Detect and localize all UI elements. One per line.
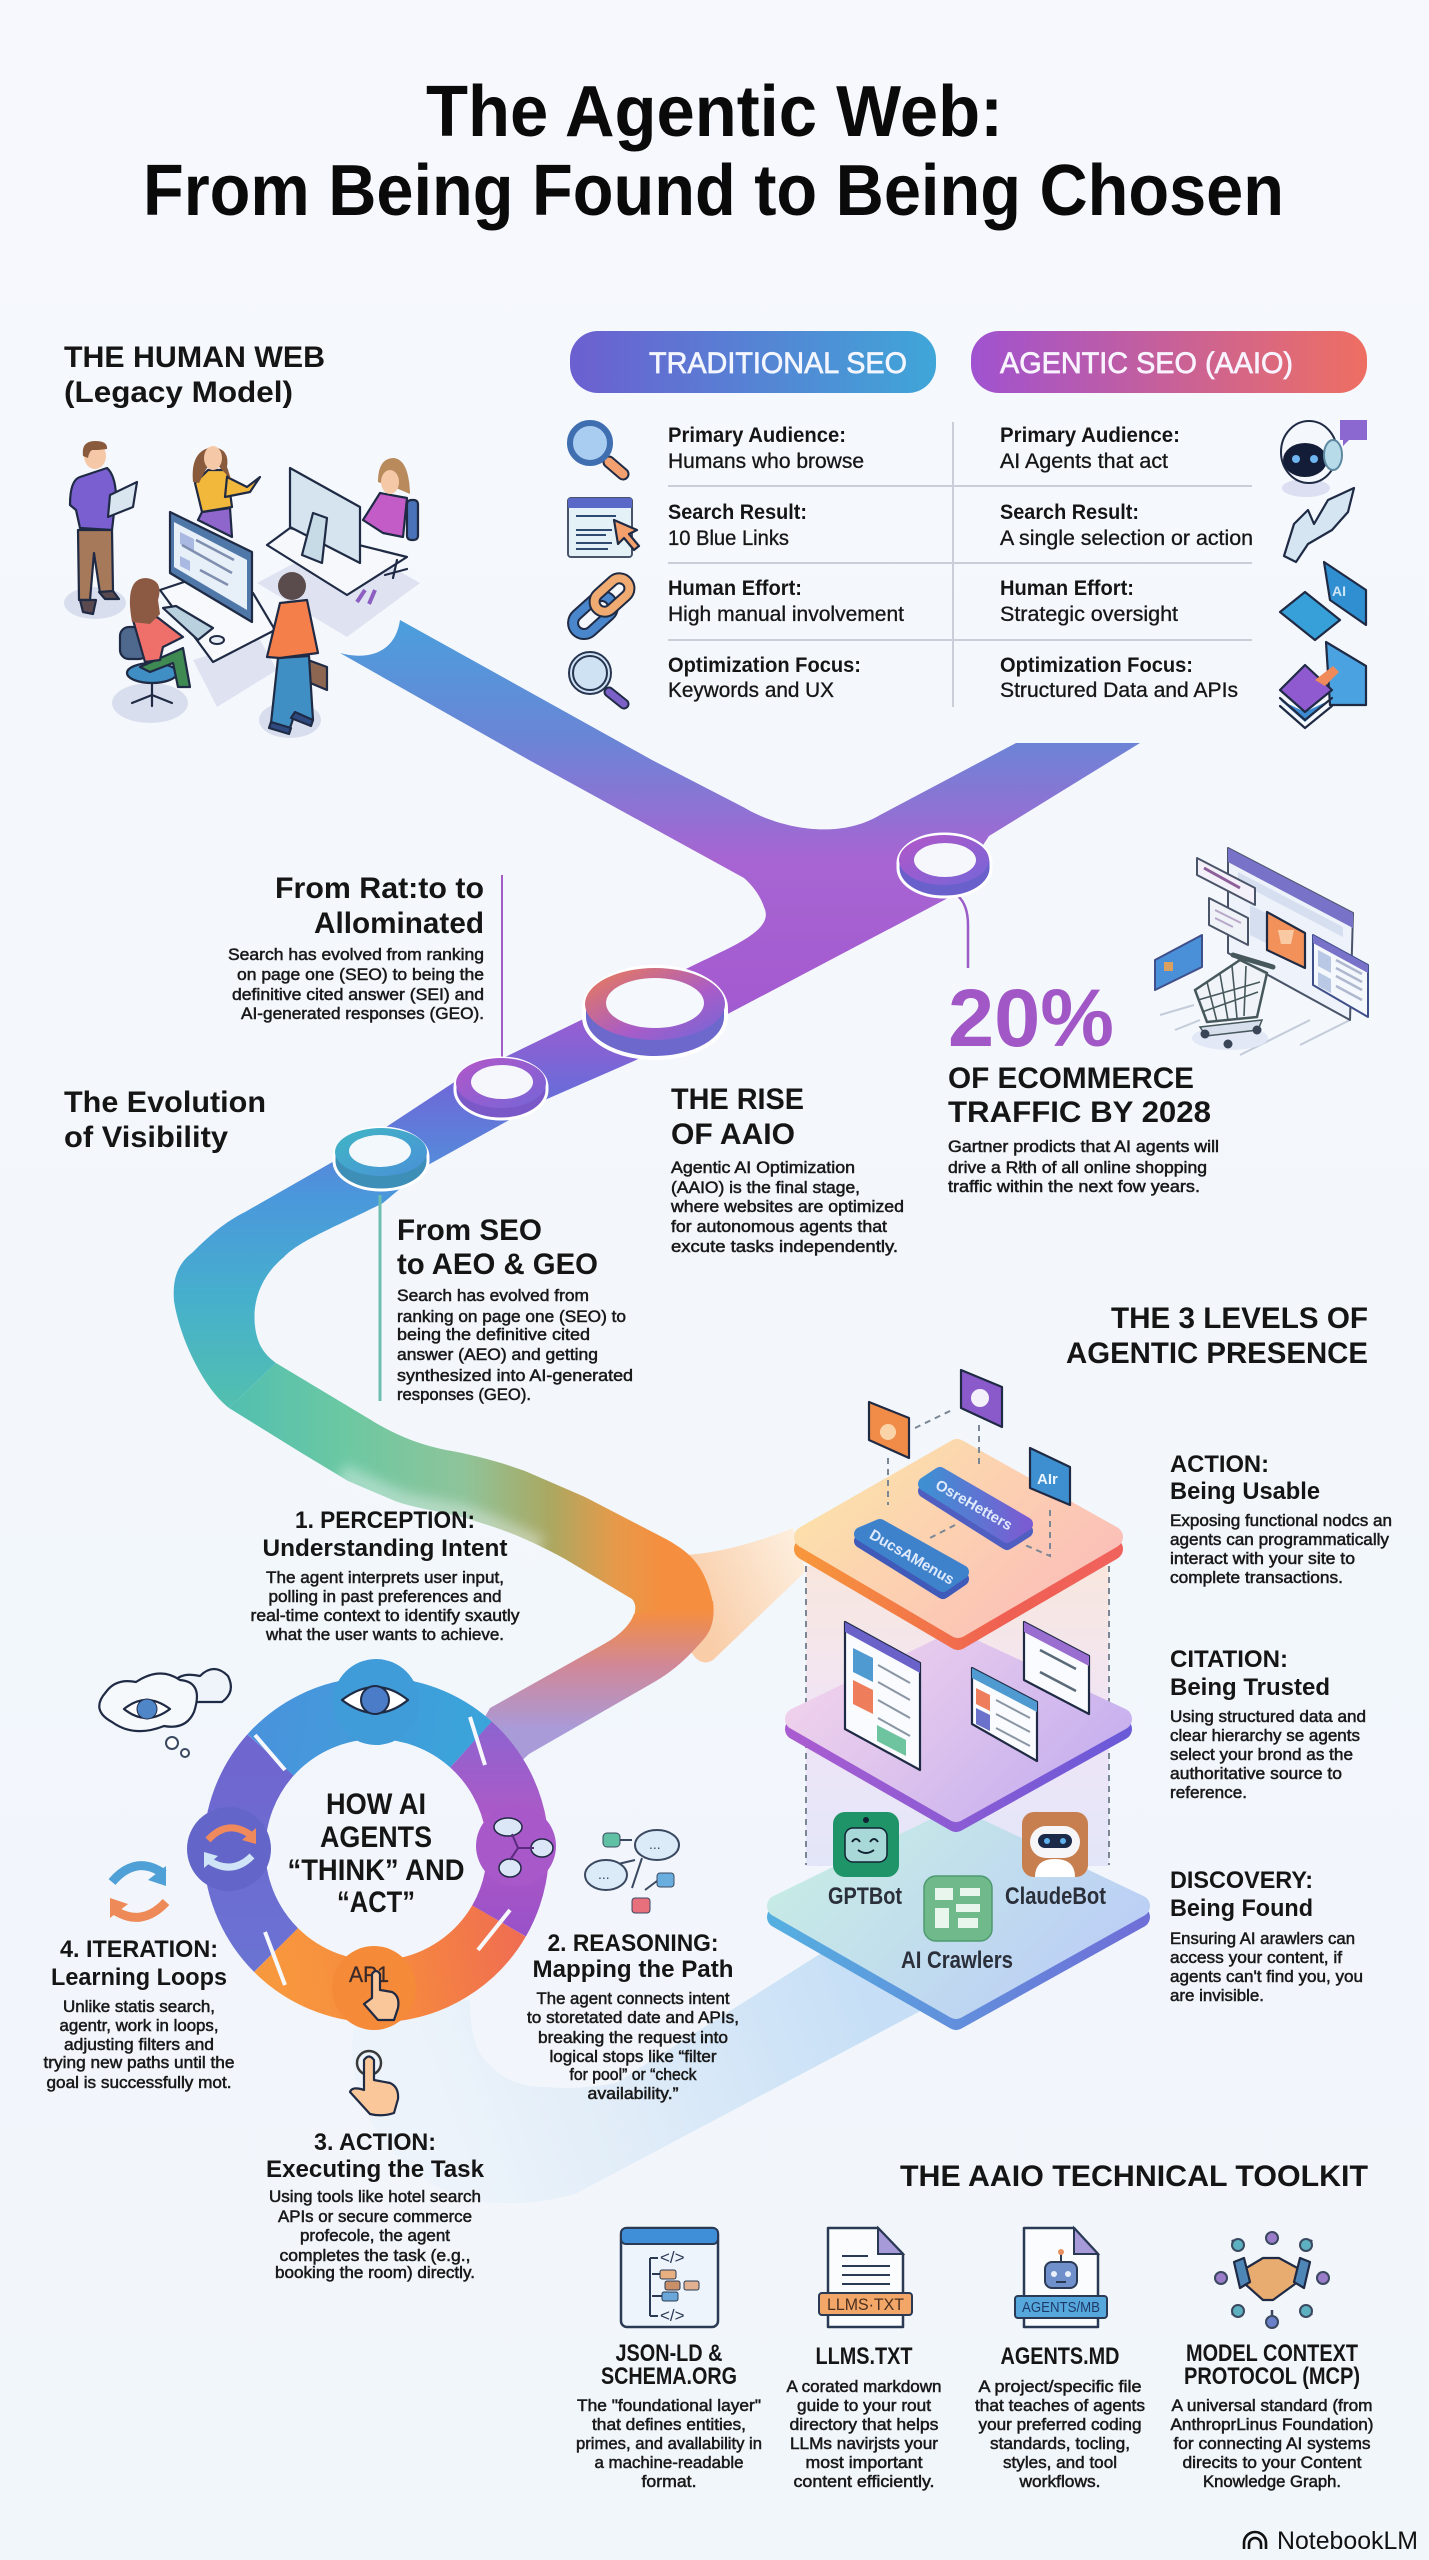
text: reasoning: 2. REASONING: xyxy=(548,1930,718,1957)
platform: citation xyxy=(796,1642,1121,1821)
text: iteration: adjusting filters and xyxy=(64,2035,214,2054)
ribbon: orange to ring stretch xyxy=(460,1601,714,1790)
center label: “THINK” AND xyxy=(288,1854,464,1887)
platform: discovery xyxy=(778,1819,1139,2019)
text: action: Using tools like hotel search xyxy=(269,2187,481,2206)
title: The Agentic Web: xyxy=(426,72,1003,152)
text: from SEO to AEO and GEO xyxy=(397,1214,633,1404)
stat: 20 percent ecommerce traffic: traffic within the next fow years. xyxy=(948,1177,1200,1196)
block: the evolution of visibility xyxy=(64,1086,266,1154)
node: purple coin xyxy=(455,1058,547,1119)
text: reasoning: The agent connects intent xyxy=(536,1989,730,2008)
text: citation level: select your brond as the xyxy=(1170,1745,1353,1764)
tool: model context protocol: MODEL CONTEXT xyxy=(1186,2340,1358,2367)
title: From Being Found to Being Chosen xyxy=(143,151,1284,231)
text: action level: ACTION: xyxy=(1170,1451,1269,1478)
row: search result xyxy=(668,501,1253,550)
icon: reasoning diagram: ... xyxy=(649,1836,661,1852)
icon: robot with chat bubble xyxy=(1281,420,1367,497)
text: action level: Exposing functional nodcs an xyxy=(1170,1511,1392,1530)
title xyxy=(143,72,1284,231)
text: perception: real-time context to identify sxautly xyxy=(250,1606,520,1625)
node: large coin xyxy=(584,967,726,1058)
icon: iteration loop arrows xyxy=(110,1866,166,1918)
tool: AGENTS.MD: styles, and tool xyxy=(1003,2453,1117,2472)
tool: LLMS.TXT: content efficiently. xyxy=(794,2472,934,2491)
text: action level: interact with your site to xyxy=(1170,1549,1355,1568)
row: optimization focus: Optimization Focus: xyxy=(668,654,861,677)
ring segment: iteration xyxy=(234,1755,276,1950)
stat: 20 percent ecommerce traffic: Gartner prodicts that AI agents will xyxy=(948,1137,1219,1156)
ring segment: action xyxy=(276,1921,499,1991)
bot labels xyxy=(828,1883,1106,1974)
ribbon: branch to platform xyxy=(684,1528,806,1662)
pill: traditional SEO xyxy=(570,331,936,393)
tool: JSON-LD and schema.org: The "foundational layer" xyxy=(577,2396,761,2415)
text: discovery level: Being Found xyxy=(1170,1895,1313,1922)
row: search result: A single selection or action xyxy=(1000,527,1253,550)
icon: AGENTS.MD document xyxy=(1015,2228,1107,2327)
main monitor and desk xyxy=(160,512,275,662)
text: citation level: reference. xyxy=(1170,1783,1247,1802)
center label: “ACT” xyxy=(337,1886,415,1919)
text: iteration: Unlike statis search, xyxy=(63,1997,215,2016)
text: action level: agents can programmatically xyxy=(1170,1530,1389,1549)
text: from SEO to AEO and GEO: being the definitive cited xyxy=(397,1325,590,1344)
row: primary audience: AI Agents that act xyxy=(1000,450,1168,473)
tool: JSON-LD and schema.org: SCHEMA.ORG xyxy=(601,2363,737,2390)
text: action: 3. ACTION: xyxy=(314,2129,436,2156)
text: action level: Being Usable xyxy=(1170,1478,1320,1505)
heading: the 3 levels of agentic presence xyxy=(1066,1302,1368,1370)
text: the rise of AAIO: for autonomous agents that xyxy=(671,1217,887,1236)
text: from SEO to AEO and GEO: synthesized into AI-generated xyxy=(397,1366,633,1385)
illustration: shopping cart and web pages xyxy=(1155,848,1368,1055)
text: from rat to alominated: on page one (SEO) to being the xyxy=(237,965,484,984)
icon: AI tablet xyxy=(1280,562,1366,640)
text: iteration: goal is successfully mot. xyxy=(46,2073,232,2092)
icon: reasoning diagram: ... xyxy=(598,1866,610,1882)
text: citation level: authoritative source to xyxy=(1170,1764,1342,1783)
translucent column xyxy=(806,1566,1109,1866)
block: the evolution of visibility: The Evolution xyxy=(64,1086,266,1119)
node: teal coin xyxy=(334,1128,428,1190)
logo: NotebookLM: NotebookLM xyxy=(1277,2527,1418,2555)
text: iteration: Learning Loops xyxy=(51,1964,227,1991)
data-flow arrows xyxy=(888,1410,1050,1556)
text: reasoning: availability.” xyxy=(588,2084,679,2103)
row: optimization focus: Optimization Focus: xyxy=(1000,654,1193,677)
text: from SEO to AEO and GEO: Search has evolved from xyxy=(397,1286,589,1305)
stat: 20 percent ecommerce traffic xyxy=(948,973,1219,1196)
icon: search results window xyxy=(568,498,639,557)
heading: the human web: (Legacy Model) xyxy=(64,376,293,409)
text: iteration: trying new paths until the xyxy=(44,2053,234,2072)
tool: LLMS.TXT: most important xyxy=(806,2453,923,2472)
text: from SEO to AEO and GEO: From SEO xyxy=(397,1214,542,1247)
row: search result: 10 Blue Links xyxy=(668,527,789,550)
text: perception xyxy=(250,1507,520,1644)
text: action: booking the room) directly. xyxy=(275,2263,475,2282)
icon: magnifier orange xyxy=(570,423,623,474)
center label xyxy=(288,1788,464,1919)
text: citation level: CITATION: xyxy=(1170,1646,1288,1673)
row: human effort: Human Effort: xyxy=(1000,577,1134,600)
icon: AI tablet: AI xyxy=(1332,583,1346,599)
tool: model context protocol: AnthroprLinus Foundation) xyxy=(1170,2415,1374,2434)
text: reasoning: logical stops like “filter xyxy=(550,2047,717,2066)
text: citation level: Using structured data and xyxy=(1170,1707,1366,1726)
text: discovery level: Ensuring AI arawlers can xyxy=(1170,1929,1355,1948)
tool: model context protocol: Knowledge Graph. xyxy=(1203,2472,1341,2491)
icon: MCP handshake hub xyxy=(1215,2232,1329,2328)
tool: JSON-LD and schema.org: primes, and avallability in xyxy=(576,2434,762,2453)
text: discovery level: are invisible. xyxy=(1170,1986,1264,2005)
stat: 20 percent ecommerce traffic: TRAFFIC BY 2028 xyxy=(948,1096,1211,1129)
text: reasoning: Mapping the Path xyxy=(532,1956,734,1983)
text: perception: Understanding Intent xyxy=(262,1535,508,1562)
text: action: Executing the Task xyxy=(266,2156,485,2183)
row: search result: Search Result: xyxy=(1000,501,1139,524)
tool: model context protocol xyxy=(1170,2340,1374,2491)
tool: AGENTS.MD xyxy=(975,2343,1145,2491)
icon: chain link xyxy=(569,574,634,639)
row: optimization focus: Keywords and UX xyxy=(668,679,834,702)
tool: LLMS.TXT: LLMS.TXT xyxy=(816,2343,913,2370)
stat: 20 percent ecommerce traffic: OF ECOMMERCE xyxy=(948,1062,1194,1095)
tool: model context protocol: direcits to your Content xyxy=(1182,2453,1362,2472)
pill: agentic SEO xyxy=(971,331,1367,393)
text: from rat to alominated: Search has evolved from ranking xyxy=(228,945,484,964)
tool: LLMS.TXT: A corated markdown xyxy=(786,2377,942,2396)
api pill lower: DucsAMenus xyxy=(866,1526,957,1589)
text: from rat to alominated: From Rat:to to xyxy=(275,872,484,905)
api pill upper xyxy=(925,1474,1026,1543)
stat: 20 percent ecommerce traffic: drive a Rłth of all online shopping xyxy=(948,1158,1207,1177)
api pill upper: OsreHetters xyxy=(932,1477,1015,1534)
center label: AGENTS xyxy=(320,1821,432,1854)
node: eye xyxy=(333,1659,419,1745)
row: primary audience: Humans who browse xyxy=(668,450,864,473)
text: perception: 1. PERCEPTION: xyxy=(295,1507,475,1534)
bot tile: ClaudeBot xyxy=(1022,1812,1088,1877)
platform: action xyxy=(805,1450,1112,1639)
icon: handshake gesture xyxy=(1284,488,1354,562)
bot tile: GPTBot xyxy=(833,1812,899,1877)
text: from rat to alominated xyxy=(228,872,484,1023)
row: primary audience: Primary Audience: xyxy=(668,424,846,447)
person gesturing xyxy=(193,446,260,537)
tool: LLMS.TXT: LLMs navirjsts your xyxy=(790,2434,938,2453)
text: action level: complete transactions. xyxy=(1170,1568,1343,1587)
person with laptop xyxy=(70,441,137,614)
text: the rise of AAIO: OF AAIO xyxy=(671,1118,795,1151)
bot labels: GPTBot xyxy=(828,1883,902,1910)
tool: LLMS.TXT: guide to your rout xyxy=(797,2396,931,2415)
row: human effort: Human Effort: xyxy=(668,577,802,600)
node: api touch xyxy=(332,1946,416,2030)
pill: traditional SEO: TRADITIONAL SEO xyxy=(649,347,907,380)
text: discovery level: DISCOVERY: xyxy=(1170,1867,1313,1894)
ribbon: green to orange stretch xyxy=(229,1363,713,1616)
icon: LLMS.TXT document: LLMS·TXT xyxy=(827,2295,904,2314)
node: network xyxy=(476,1806,556,1886)
text: perception: polling in past preferences and xyxy=(268,1587,502,1606)
text: from SEO to AEO and GEO: to AEO & GEO xyxy=(397,1248,598,1281)
icon: JSON window: </> xyxy=(660,2248,685,2267)
cycle ring: how AI agents think and act xyxy=(187,1659,556,2030)
tool: AGENTS.MD: your preferred coding xyxy=(978,2415,1142,2434)
node: refresh xyxy=(187,1807,271,1891)
row: primary audience: Primary Audience: xyxy=(1000,424,1180,447)
text: reasoning: for pool” or “check xyxy=(570,2065,697,2084)
text: action: profecole, the agent xyxy=(300,2226,450,2245)
tool: JSON-LD and schema.org: a machine-readable xyxy=(594,2453,744,2472)
tool: AGENTS.MD: A project/specific file xyxy=(978,2377,1142,2396)
text: action xyxy=(266,2129,485,2282)
tool: AGENTS.MD: standards, tocling, xyxy=(990,2434,1130,2453)
web documents on citation platform xyxy=(845,1622,1089,1770)
standing person with briefcase xyxy=(267,572,327,734)
text: action: APIs or secure commerce xyxy=(278,2207,472,2226)
tool: LLMS.TXT: directory that helps xyxy=(790,2415,938,2434)
node: top right coin xyxy=(898,834,991,897)
text: the rise of AAIO: where websites are optimized xyxy=(670,1197,904,1216)
stacked platform diagram xyxy=(778,1370,1139,2019)
bot labels: ClaudeBot xyxy=(1005,1883,1106,1910)
tool: AGENTS.MD: workflows. xyxy=(1018,2472,1100,2491)
text: from rat to alominated: AI-generated responses (GEO). xyxy=(241,1004,484,1023)
icon: LLMS.TXT document xyxy=(819,2228,912,2327)
ribbon: main journey path xyxy=(174,620,1140,1408)
icon: AGENTS.MD document: AGENTS/MB xyxy=(1022,2299,1100,2316)
tool: model context protocol: PROTOCOL (MCP) xyxy=(1184,2363,1360,2390)
connector lines xyxy=(380,875,968,1401)
text: action: completes the task (e.g., xyxy=(280,2246,470,2265)
pill: agentic SEO: AGENTIC SEO (AAIO) xyxy=(1000,347,1293,380)
text: perception: The agent interprets user input, xyxy=(266,1568,504,1587)
illustration: people working at computers xyxy=(64,441,420,738)
text: citation level xyxy=(1170,1646,1366,1802)
tool: JSON-LD and schema.org: that defines entities, xyxy=(592,2415,746,2434)
ring segment: perception xyxy=(270,1708,471,1755)
text: reasoning: breaking the request into xyxy=(538,2028,728,2047)
text: discovery level: agents can't find you, you xyxy=(1170,1967,1363,1986)
tool: JSON-LD and schema.org: format. xyxy=(642,2472,696,2491)
heading: the 3 levels of agentic presence: THE 3 LEVELS OF xyxy=(1111,1302,1368,1335)
icon: pointing hand xyxy=(350,2051,398,2115)
block: the evolution of visibility: of Visibility xyxy=(64,1121,228,1154)
row: optimization focus xyxy=(668,654,1238,702)
text: perception: what the user wants to achieve. xyxy=(265,1625,504,1644)
text: from rat to alominated: definitive cited answer (SEI) and xyxy=(232,985,484,1004)
icon: magnifier purple xyxy=(569,652,624,704)
text: the rise of AAIO xyxy=(670,1083,904,1256)
tool: model context protocol: A universal standard (from xyxy=(1172,2396,1372,2415)
bot labels: AI Crawlers xyxy=(901,1947,1013,1974)
tool: LLMS.TXT xyxy=(786,2343,942,2491)
icon: reasoning diagram xyxy=(585,1830,679,1913)
tool: AGENTS.MD: that teaches of agents xyxy=(975,2396,1145,2415)
text: discovery level xyxy=(1170,1867,1363,2005)
heading: the human web xyxy=(64,341,325,409)
row: human effort: Strategic oversight xyxy=(1000,603,1178,626)
tool: model context protocol: for connecting AI systems xyxy=(1174,2434,1370,2453)
ring segment: reasoning xyxy=(471,1744,518,1921)
text: iteration: 4. ITERATION: xyxy=(60,1936,218,1963)
text: the rise of AAIO: (AAIO) is the final stage, xyxy=(671,1178,860,1197)
text: from SEO to AEO and GEO: responses (GEO). xyxy=(397,1385,531,1404)
text: the rise of AAIO: THE RISE xyxy=(671,1083,804,1116)
text: reasoning: to storetated date and APIs, xyxy=(527,2008,739,2027)
text: discovery level: access your content, if xyxy=(1170,1948,1342,1967)
row: human effort xyxy=(668,577,1178,626)
heading: the human web: THE HUMAN WEB xyxy=(64,341,325,374)
text: from SEO to AEO and GEO: ranking on page one (SEO) to xyxy=(397,1307,626,1326)
bot tile: AI crawlers xyxy=(924,1876,992,1941)
row: human effort: High manual involvement xyxy=(668,603,904,626)
floating tile: purple xyxy=(961,1370,1002,1427)
ribbon: pale lower tail xyxy=(352,1935,960,2203)
floating tile: blue xyxy=(1030,1448,1070,1505)
text: citation level: Being Trusted xyxy=(1170,1674,1330,1701)
icon: JSON window: </> xyxy=(660,2306,685,2325)
floating tile: blue: AIr xyxy=(1037,1471,1058,1488)
desk with back monitor and seated person xyxy=(267,458,418,604)
text: the rise of AAIO: excute tasks independently. xyxy=(671,1237,898,1256)
icon: thinking cloud with eye xyxy=(99,1669,231,1757)
text: reasoning xyxy=(527,1930,739,2103)
text: iteration xyxy=(44,1936,234,2092)
row: primary audience xyxy=(668,424,1180,473)
row: search result: Search Result: xyxy=(668,501,807,524)
text: the rise of AAIO: Agentic AI Optimization xyxy=(671,1158,855,1177)
heading: the 3 levels of agentic presence: AGENTIC PRESENCE xyxy=(1066,1337,1368,1370)
tool: JSON-LD and schema.org: JSON-LD & xyxy=(616,2340,722,2367)
tool: JSON-LD and schema.org xyxy=(576,2340,762,2491)
icon: tablet and layer stack xyxy=(1280,642,1366,728)
heading: the AAIO technical toolkit: THE AAIO TECHNICAL TOOLKIT xyxy=(900,2160,1368,2193)
icon: JSON window xyxy=(621,2228,718,2327)
comparison table xyxy=(668,422,1253,707)
text: iteration: agentr, work in loops, xyxy=(60,2016,218,2035)
text: from SEO to AEO and GEO: answer (AEO) and getting xyxy=(397,1345,598,1364)
node: api touch: AP1 xyxy=(349,1962,389,1987)
center label: HOW AI xyxy=(326,1788,426,1821)
seated person xyxy=(120,578,190,706)
stat: 20 percent ecommerce traffic: 20% xyxy=(948,973,1114,1064)
row: optimization focus: Structured Data and APIs xyxy=(1000,679,1238,702)
text: citation level: clear hierarchy se agents xyxy=(1170,1726,1360,1745)
tool: AGENTS.MD: AGENTS.MD xyxy=(1000,2343,1120,2370)
text: action level xyxy=(1170,1451,1392,1587)
floating tile: orange xyxy=(869,1402,909,1458)
text: from rat to alominated: Allominated xyxy=(314,907,484,940)
